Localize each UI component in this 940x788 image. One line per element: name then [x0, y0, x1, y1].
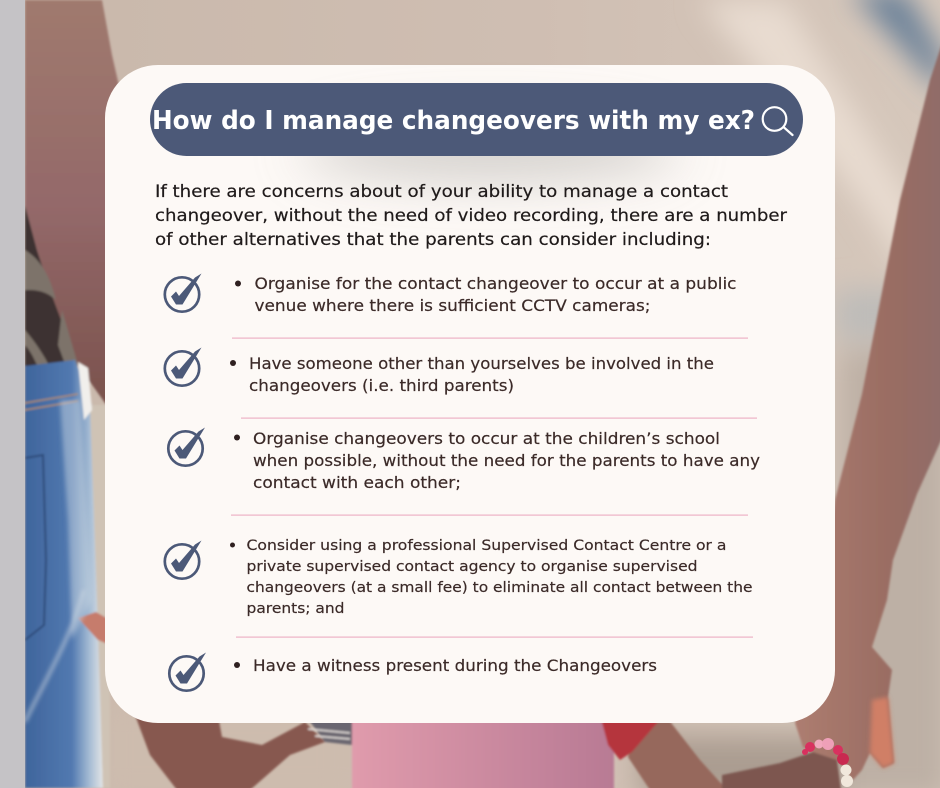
child shirt: [352, 715, 614, 788]
icon: magnifying glass: [763, 107, 792, 135]
red sleeve: [600, 715, 664, 760]
bullet and text 3: when possible, without the need for the parents to have any: [253, 452, 760, 470]
list item 5: [169, 652, 657, 691]
child right wrist: [722, 752, 841, 788]
child right arm: [628, 715, 727, 788]
heading text: How do I manage changeovers with my ex?: [152, 106, 755, 136]
jeans waistband stitching: [25, 394, 78, 410]
striped sleeve: [305, 715, 352, 745]
child hand at left: [78, 612, 110, 645]
list item 2: [165, 348, 714, 395]
jeans soft highlights: [25, 400, 894, 768]
intro paragraph: of other alternatives that the parents can consider including:: [155, 229, 711, 249]
heading shadow: [300, 120, 680, 180]
child left arm: [135, 715, 325, 788]
jeans pocket: [25, 455, 46, 640]
left grey strip: [0, 0, 25, 788]
list item 4: [165, 537, 753, 617]
bullet and text 3: contact with each other;: [253, 474, 461, 492]
icon: check mark 2: [165, 348, 202, 386]
icon: check mark 1: [165, 274, 202, 312]
bullet and text 1: venue where there is sufficient CCTV cameras;: [254, 297, 650, 315]
bullet and text 4: Consider using a professional Supervised Contact Centre or a: [246, 537, 726, 554]
left adult jeans: [25, 360, 103, 788]
bullet and text 3: Organise changeovers to occur at the children’s school: [253, 430, 720, 448]
heading pill: [150, 83, 803, 156]
bullet and text 4: changeovers (at a small fee) to eliminate all contact between the: [246, 579, 753, 596]
bullet and text 2: changeovers (i.e. third parents): [249, 377, 514, 395]
bullet and text 3: [234, 430, 760, 492]
icon: check mark 4: [165, 540, 202, 579]
bullet and text 1: [235, 275, 736, 315]
left adult dark shirt: [25, 205, 78, 372]
list item 1: [165, 274, 737, 315]
icon: check mark 5: [169, 652, 206, 691]
bullet and text 2: Have someone other than yourselves be involved in the: [249, 355, 714, 373]
intro paragraph: changeover, without the need of video recording, there are a number: [155, 205, 787, 225]
bullet and text 5: Have a witness present during the Changeovers: [253, 657, 657, 675]
bullet and text 4: [230, 537, 753, 617]
bullet and text 4: private supervised contact agency to organise supervised: [246, 558, 698, 575]
intro paragraph: [155, 181, 787, 249]
bullet and text 2: [230, 355, 714, 395]
bullet and text 4: parents; and: [246, 600, 344, 617]
left adult arm: [25, 0, 120, 410]
intro paragraph: If there are concerns about of your ability to manage a contact: [155, 181, 728, 201]
icon: check mark 3: [168, 428, 205, 466]
bullet and text 1: Organise for the contact changeover to occur at a public: [254, 275, 736, 293]
list item 3: [168, 428, 760, 492]
main card: [105, 65, 835, 723]
bracelet: [802, 738, 853, 787]
right adult arm and hand: [795, 25, 940, 780]
